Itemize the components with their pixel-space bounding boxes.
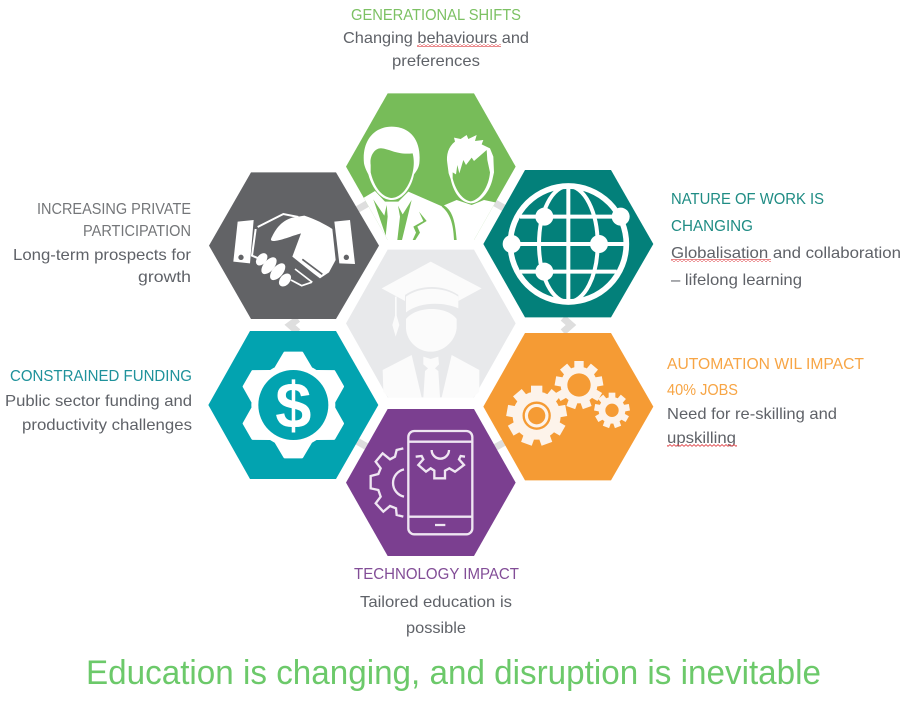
hexagon: constrained funding bbox=[208, 331, 378, 479]
text: private participation bbox=[13, 201, 192, 286]
text: constrained funding: CONSTRAINED FUNDING bbox=[10, 368, 192, 385]
text: nature of work: CHANGING bbox=[671, 218, 753, 235]
text: technology impact: Tailored education is bbox=[360, 594, 512, 611]
icon: globe bbox=[503, 186, 630, 302]
text: generational shifts: Changing behaviours and bbox=[343, 30, 529, 47]
text: nature of work: Globalisation and collaboration bbox=[671, 245, 901, 262]
text: private participation: PARTICIPATION bbox=[83, 223, 191, 240]
text: constrained funding bbox=[5, 368, 192, 434]
text: technology impact bbox=[354, 566, 519, 637]
hexagon: nature of work bbox=[483, 170, 653, 317]
hexagon: private participation bbox=[209, 172, 379, 319]
text: automation: Need for re-skilling and bbox=[667, 406, 837, 423]
text: private participation: Long-term prospects for bbox=[13, 247, 192, 264]
icon: graduate bbox=[382, 262, 482, 397]
icon: gears bbox=[506, 361, 630, 446]
icon: dollar gear bbox=[240, 353, 347, 457]
text: technology impact: TECHNOLOGY IMPACT bbox=[354, 566, 519, 583]
text: nature of work bbox=[671, 191, 901, 289]
hexagon: central graduate bbox=[346, 250, 516, 397]
text: private participation: INCREASING PRIVATE bbox=[37, 201, 191, 218]
title: Education is changing, and disruption is inevitable bbox=[86, 654, 821, 692]
hexagon: technology impact bbox=[346, 409, 516, 556]
icon: dollar gear: $ bbox=[275, 369, 311, 442]
text: constrained funding: Public sector funding and bbox=[5, 393, 192, 410]
icon: phone and gears bbox=[371, 431, 472, 534]
text: nature of work: NATURE OF WORK IS bbox=[671, 191, 824, 208]
text: automation: upskilling bbox=[667, 430, 736, 447]
text: nature of work: – lifelong learning bbox=[671, 272, 802, 289]
text: automation bbox=[667, 356, 864, 447]
text: constrained funding: productivity challenges bbox=[22, 417, 192, 434]
icon: handshake bbox=[233, 214, 355, 289]
text: automation: 40% JOBS bbox=[667, 382, 738, 399]
text: generational shifts: GENERATIONAL SHIFTS bbox=[351, 7, 521, 24]
hexagon: automation bbox=[483, 333, 653, 480]
hexagon: generational shifts bbox=[346, 93, 516, 240]
text: technology impact: possible bbox=[406, 620, 466, 637]
connecting ring bbox=[290, 167, 571, 483]
text: generational shifts bbox=[343, 7, 529, 70]
text: automation: AUTOMATION WIL IMPACT bbox=[667, 356, 864, 373]
icon: two people bbox=[360, 127, 500, 240]
text: private participation: growth bbox=[138, 269, 191, 286]
text: generational shifts: preferences bbox=[392, 53, 480, 70]
